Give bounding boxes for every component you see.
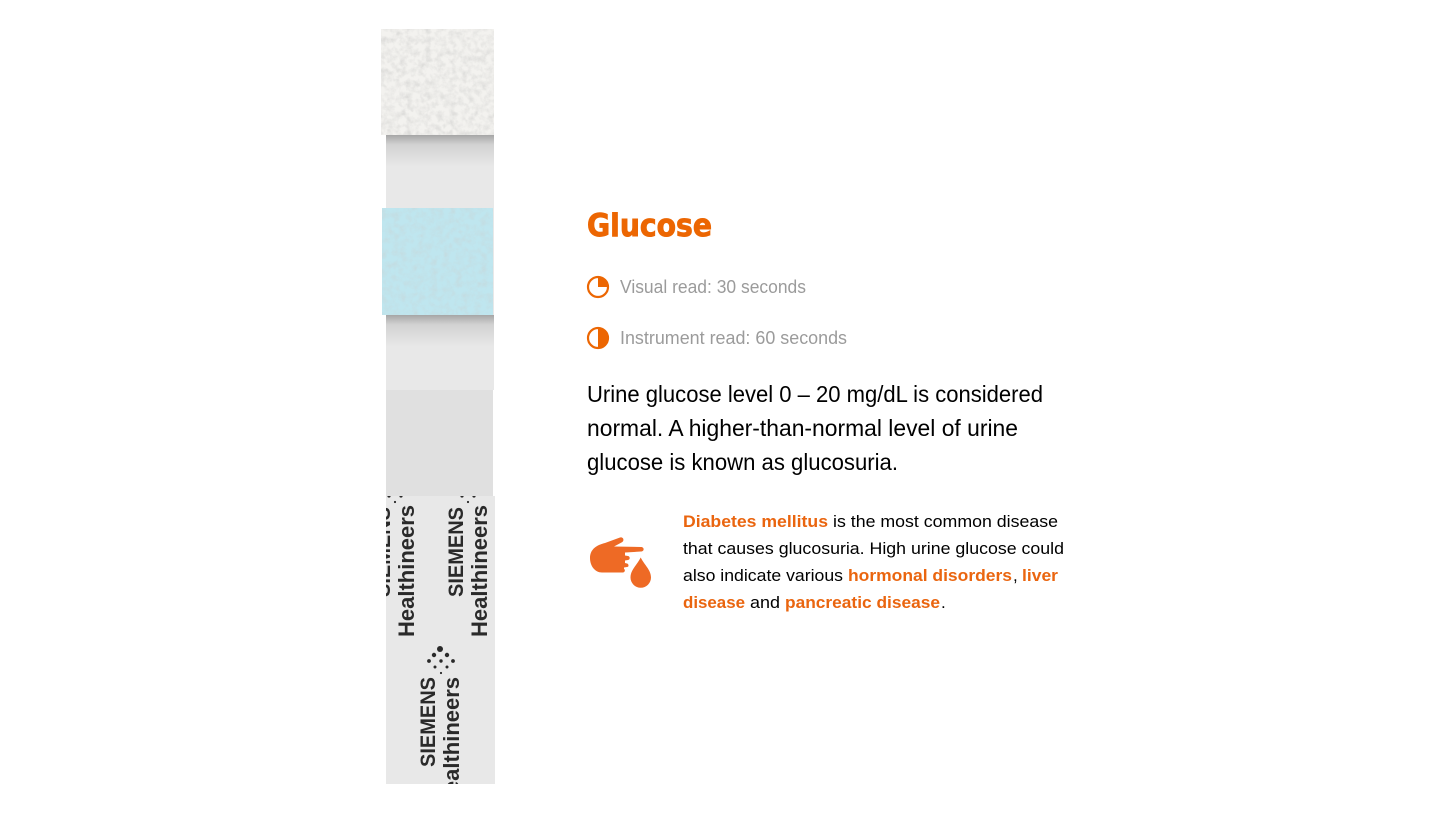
text: causes of glucosuria: disease <box>683 593 745 612</box>
text: causes of glucosuria: is the most common disease <box>833 512 1058 531</box>
icon: half clock <box>588 328 608 348</box>
text: causes of glucosuria: liver <box>1022 566 1058 585</box>
Siemens Healthineers logos: SIEMENS <box>417 677 440 767</box>
text: glucose description <box>587 381 1043 475</box>
Siemens Healthineers logos: SIEMENS <box>372 507 395 597</box>
shadow under first pad <box>386 135 494 167</box>
text: causes of glucosuria: , <box>1013 566 1018 585</box>
icon: quarter clock <box>588 277 608 297</box>
Siemens Healthineers logos: SIEMENS <box>445 507 468 597</box>
strip printed segment <box>386 496 495 784</box>
panel: test strip <box>381 29 495 784</box>
text: visual read time: Visual read: 30 seconds <box>620 277 806 297</box>
Siemens Healthineers logos: Healthineers <box>439 677 464 809</box>
text: causes of glucosuria <box>683 512 1064 612</box>
icon: finger pointing at drop <box>590 537 651 588</box>
text: causes of glucosuria: pancreatic disease <box>785 593 940 612</box>
shadow under blue pad <box>386 315 494 347</box>
text: causes of glucosuria: and <box>750 593 780 612</box>
text: causes of glucosuria: that causes glucosuria. High urine glucose could <box>683 539 1064 558</box>
text: causes of glucosuria: Diabetes mellitus <box>683 512 828 531</box>
strip darker segment <box>386 390 493 496</box>
Siemens Healthineers logos: Healthineers <box>394 505 419 637</box>
heading: Glucose: Glucose <box>587 208 712 244</box>
Siemens Healthineers logos <box>386 496 487 784</box>
text: glucose description: Urine glucose level 0 – 20 mg/dL is considered <box>587 381 1043 407</box>
blue reagent pad <box>382 208 493 315</box>
strip upper segment <box>386 135 494 390</box>
text: causes of glucosuria: hormonal disorders <box>848 566 1012 585</box>
text: causes of glucosuria: . <box>941 593 946 612</box>
Siemens Healthineers logos: Healthineers <box>467 505 492 637</box>
white reagent pad <box>381 29 494 135</box>
text: glucose description: normal. A higher-than-normal level of urine <box>587 415 1018 441</box>
text: glucose description: glucose is known as glucosuria. <box>587 449 898 475</box>
text: instrument read time: Instrument read: 60 seconds <box>620 328 847 348</box>
text: causes of glucosuria: also indicate various <box>683 566 843 585</box>
